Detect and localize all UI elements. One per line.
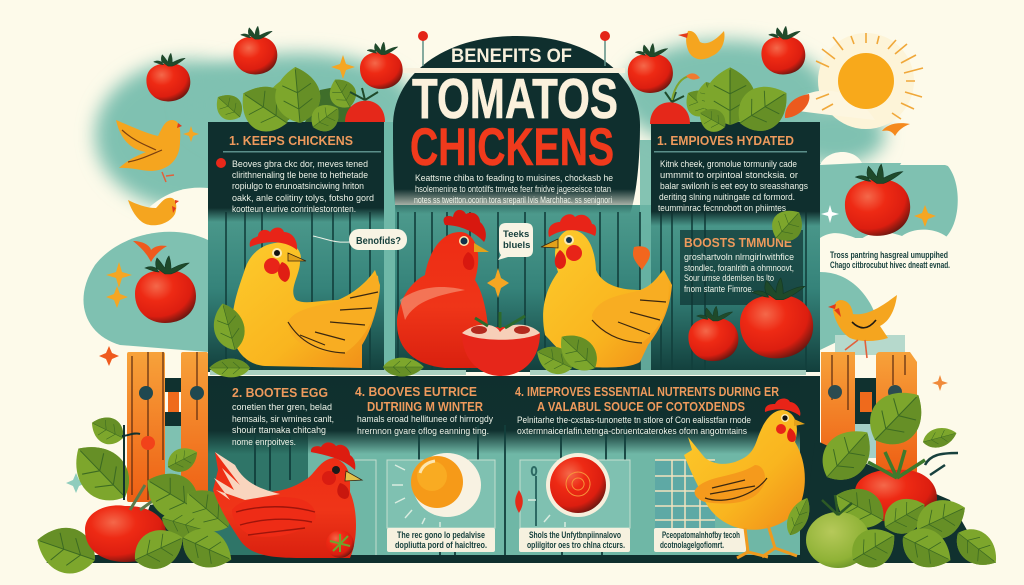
- body text: keeps chickens: ropiulgo to erunoatsinciwing hriton: [232, 181, 364, 192]
- body text: keeps chickens: clirithnenaling tle bene to hethetade: [232, 170, 368, 181]
- leaves: bottom left cluster: [127, 462, 240, 577]
- body text: immune: [684, 252, 794, 295]
- body text: keeps chickens: [232, 159, 374, 215]
- leaves at chicken feet: [208, 300, 605, 380]
- bird: top right: [678, 31, 724, 59]
- title line: chickens: CHICKENS: [410, 118, 614, 177]
- body text: egg: conetien ther gren, belad: [232, 402, 332, 413]
- tomato card: [515, 453, 630, 552]
- tomato: behind left panel: [345, 88, 385, 122]
- egg caption: dopliutta pord of haicltreo.: [395, 540, 487, 550]
- teal background blobs: [83, 33, 960, 355]
- tomato: top: [233, 26, 277, 74]
- heading: nutrients: [515, 384, 780, 414]
- heading: egg: 2. BOOTES EGG: [232, 385, 328, 400]
- heading: nutrients: 4. IMEPROVES ESSENTIAL NUTRENTS DURING ER: [515, 384, 780, 399]
- title intro text: hsolemenine to ontotilfs tmvete feer fnidve jageseisce totan: [415, 184, 611, 195]
- body text: winter: hrernnon gvare oflog eanning ting.: [357, 426, 489, 437]
- body text: nutrients: oxtermnaicerlafin.tetnga-cbruentcaterokes ofom angotmtains: [517, 426, 747, 437]
- fence right: [821, 352, 917, 472]
- body text: egg: nome enrpoitves.: [232, 437, 296, 448]
- speech bubble: benefits: [313, 229, 407, 250]
- chicken: red lower left: [213, 442, 362, 558]
- grid caption: Pceopatomalnhofby tecoh: [662, 530, 740, 540]
- tomato: bottom left: [30, 485, 166, 581]
- heading: immune: BOOSTS TMMUNE: [684, 235, 792, 250]
- heading: keeps chickens: 1. KEEPS CHICKENS: [229, 133, 353, 148]
- comb: [548, 214, 596, 237]
- title intro text: [414, 173, 613, 206]
- grid caption: [654, 528, 746, 552]
- egg caption: The rec gono lo pedalvise: [397, 530, 485, 540]
- comb: [250, 228, 297, 250]
- panel: keeps chickens: [208, 122, 384, 222]
- grid caption: dcotnolagelgofiomrt.: [660, 540, 724, 550]
- body text: immune: Sour urnse ddemlsen bs lto: [684, 273, 774, 284]
- egg card: [387, 453, 495, 552]
- wing: [592, 276, 669, 344]
- leaf cluster: top right: [679, 67, 809, 141]
- tomato: left circle: [135, 256, 196, 323]
- eye and beak: [264, 248, 306, 282]
- sparkles: [66, 55, 948, 493]
- speech bubble: benefits: Benofids?: [356, 235, 401, 247]
- orange bird mark: [133, 241, 167, 262]
- tomato: green: [806, 479, 892, 568]
- section: winter nutrition: [355, 384, 495, 552]
- body text: immune: fnom stante Fimroe.: [684, 284, 754, 295]
- leaf cluster: top left: [210, 65, 361, 142]
- section: essential nutrients: [515, 384, 780, 552]
- body text: keeps chickens: Beoves gbra ckc dor, meves tened: [232, 159, 368, 170]
- eye and beak: [400, 236, 489, 320]
- body text: hydrated: deriting slning nuitingate cd formord.: [659, 192, 795, 203]
- leaves: bottom right cluster: [843, 490, 1006, 577]
- title intro text: notes ss tweitton.ocorin tora sreparil Ivis Marchhac. ss senignori: [414, 195, 612, 206]
- tomato: top centre: [360, 42, 403, 89]
- chicken: red centre: [397, 210, 490, 368]
- ground strip: [46, 555, 996, 563]
- body text: winter: hamals eroad hellitunee of hirrrogdy: [357, 414, 493, 425]
- body text: winter: [357, 414, 493, 437]
- leaves: right cluster upper: [811, 378, 958, 491]
- chicken: yellow right: [541, 214, 672, 367]
- leaves: chicken right sprig: [781, 494, 816, 539]
- tomato: top right: [628, 43, 673, 93]
- side caption: Tross pantring hasgreal umuppihed: [830, 250, 948, 260]
- comb: [765, 398, 800, 416]
- heading: hydrated: 1. EMPIOVES HYDATED: [657, 133, 794, 148]
- speech bubble: feeks bluels: bluels: [503, 240, 530, 251]
- title line: benefits of: BENEFITS OF: [451, 46, 572, 67]
- comb: [311, 442, 355, 470]
- heading: winter: DUTRIING M WINTER: [367, 399, 484, 414]
- legs: [737, 525, 797, 558]
- tomato: upper left: [146, 53, 190, 101]
- tomato caption: [519, 528, 630, 552]
- body text: hydrated: teumminrac fecnnobott on phiimtes: [658, 203, 786, 214]
- comb: [444, 210, 486, 242]
- body text: egg: [232, 402, 334, 448]
- bird: perched chick right: [828, 295, 897, 358]
- heading: winter: 4. BOOVES EUTRICE: [355, 384, 477, 399]
- eye and beak: [322, 466, 362, 499]
- lower panel backdrop: [208, 370, 820, 562]
- sun: [816, 33, 923, 136]
- title pins: [418, 31, 610, 66]
- title circle: [393, 31, 640, 214]
- speech bubble: feeks bluels: [498, 223, 533, 260]
- side caption: Chago citbrocubut hivec dneatt evnad.: [830, 260, 950, 270]
- bird: upper left: [116, 120, 182, 182]
- title band: [403, 68, 625, 73]
- tomato: side right: [845, 164, 910, 236]
- leaf: immune panel: [765, 202, 810, 248]
- heading: nutrients: A VALABUL SOUCE OF COTOXDENDS: [537, 399, 745, 414]
- foliage backdrop: bottom left and right: [130, 440, 985, 562]
- body text: hydrated: balar swilonh is eet eoy to sreasshangs: [660, 181, 808, 192]
- body text: hydrated: Kitnk cheek, gromolue tormunily cade: [660, 159, 797, 170]
- body text: egg: hemsails, sir wrnines canlt,: [232, 414, 334, 425]
- tomato: behind right panel: [650, 73, 700, 124]
- speech bubble: feeks bluels: Teeks: [503, 229, 529, 240]
- panel: improves hydrated: [651, 122, 820, 226]
- orange heart marker: [633, 246, 650, 270]
- egg caption: [387, 528, 495, 552]
- tomato caption: oplilgitor oes tro chlna ctcurs.: [527, 540, 625, 550]
- chicken: yellow left: [232, 228, 380, 368]
- body text: nutrients: [517, 415, 751, 437]
- tomato caption: Shols the Unfytbnpiinnalovo: [529, 530, 621, 540]
- wing: [288, 275, 379, 353]
- cut tomato bowl: [462, 312, 540, 376]
- body text: immune: stondlec, foranlrith a ohmnoovt,: [684, 263, 794, 274]
- eye and beak: [776, 414, 805, 442]
- body text: hydrated: ummmit to orpintoal stoncksia. or: [660, 170, 798, 181]
- body text: egg: shouir ttamaka chitcahg: [232, 425, 326, 436]
- grid chart card: [654, 460, 746, 552]
- body text: hydrated: [658, 159, 808, 214]
- heading: winter: [355, 384, 484, 414]
- wing: [695, 465, 767, 504]
- tomato: bottom right red: [855, 450, 937, 522]
- leaves: left vine: [61, 411, 202, 513]
- body text: keeps chickens: oakk, anle colitiny tolys, fotsho gord: [232, 193, 374, 204]
- tomato: immune small: [688, 306, 738, 361]
- tomato: far upper right: [761, 26, 805, 74]
- bullet: red dot: [216, 158, 226, 168]
- body text: nutrients: Pelnitarhe the-cxstas-tunonette tn stlore of Con ealisstfan rnode: [517, 415, 751, 426]
- tomato on red chicken: [326, 530, 354, 558]
- title intro text: Keattsme chiba to feading to muisines, chockasb he: [415, 173, 613, 184]
- title line: tomatos: TOMATOS: [412, 67, 618, 131]
- body text: immune: groshartvoln nlrngirlrwithfice: [684, 252, 794, 263]
- body text: keeps chickens: kootteun eurive conrinlestoronten.: [232, 204, 356, 215]
- section: boosts egg: [232, 385, 334, 448]
- chicken: yellow lower right: [684, 398, 805, 558]
- fence backdrop, upper section: [208, 122, 820, 372]
- wing: [232, 497, 316, 537]
- side caption: [830, 250, 950, 270]
- eye and beak: [541, 235, 582, 269]
- tomato: immune large: [740, 278, 813, 358]
- leaf: floating right: [921, 424, 959, 451]
- panel: boosts immune: [680, 230, 803, 305]
- tail feathers: [214, 452, 280, 500]
- bird: lower left: [128, 198, 179, 225]
- fence left: [127, 352, 208, 502]
